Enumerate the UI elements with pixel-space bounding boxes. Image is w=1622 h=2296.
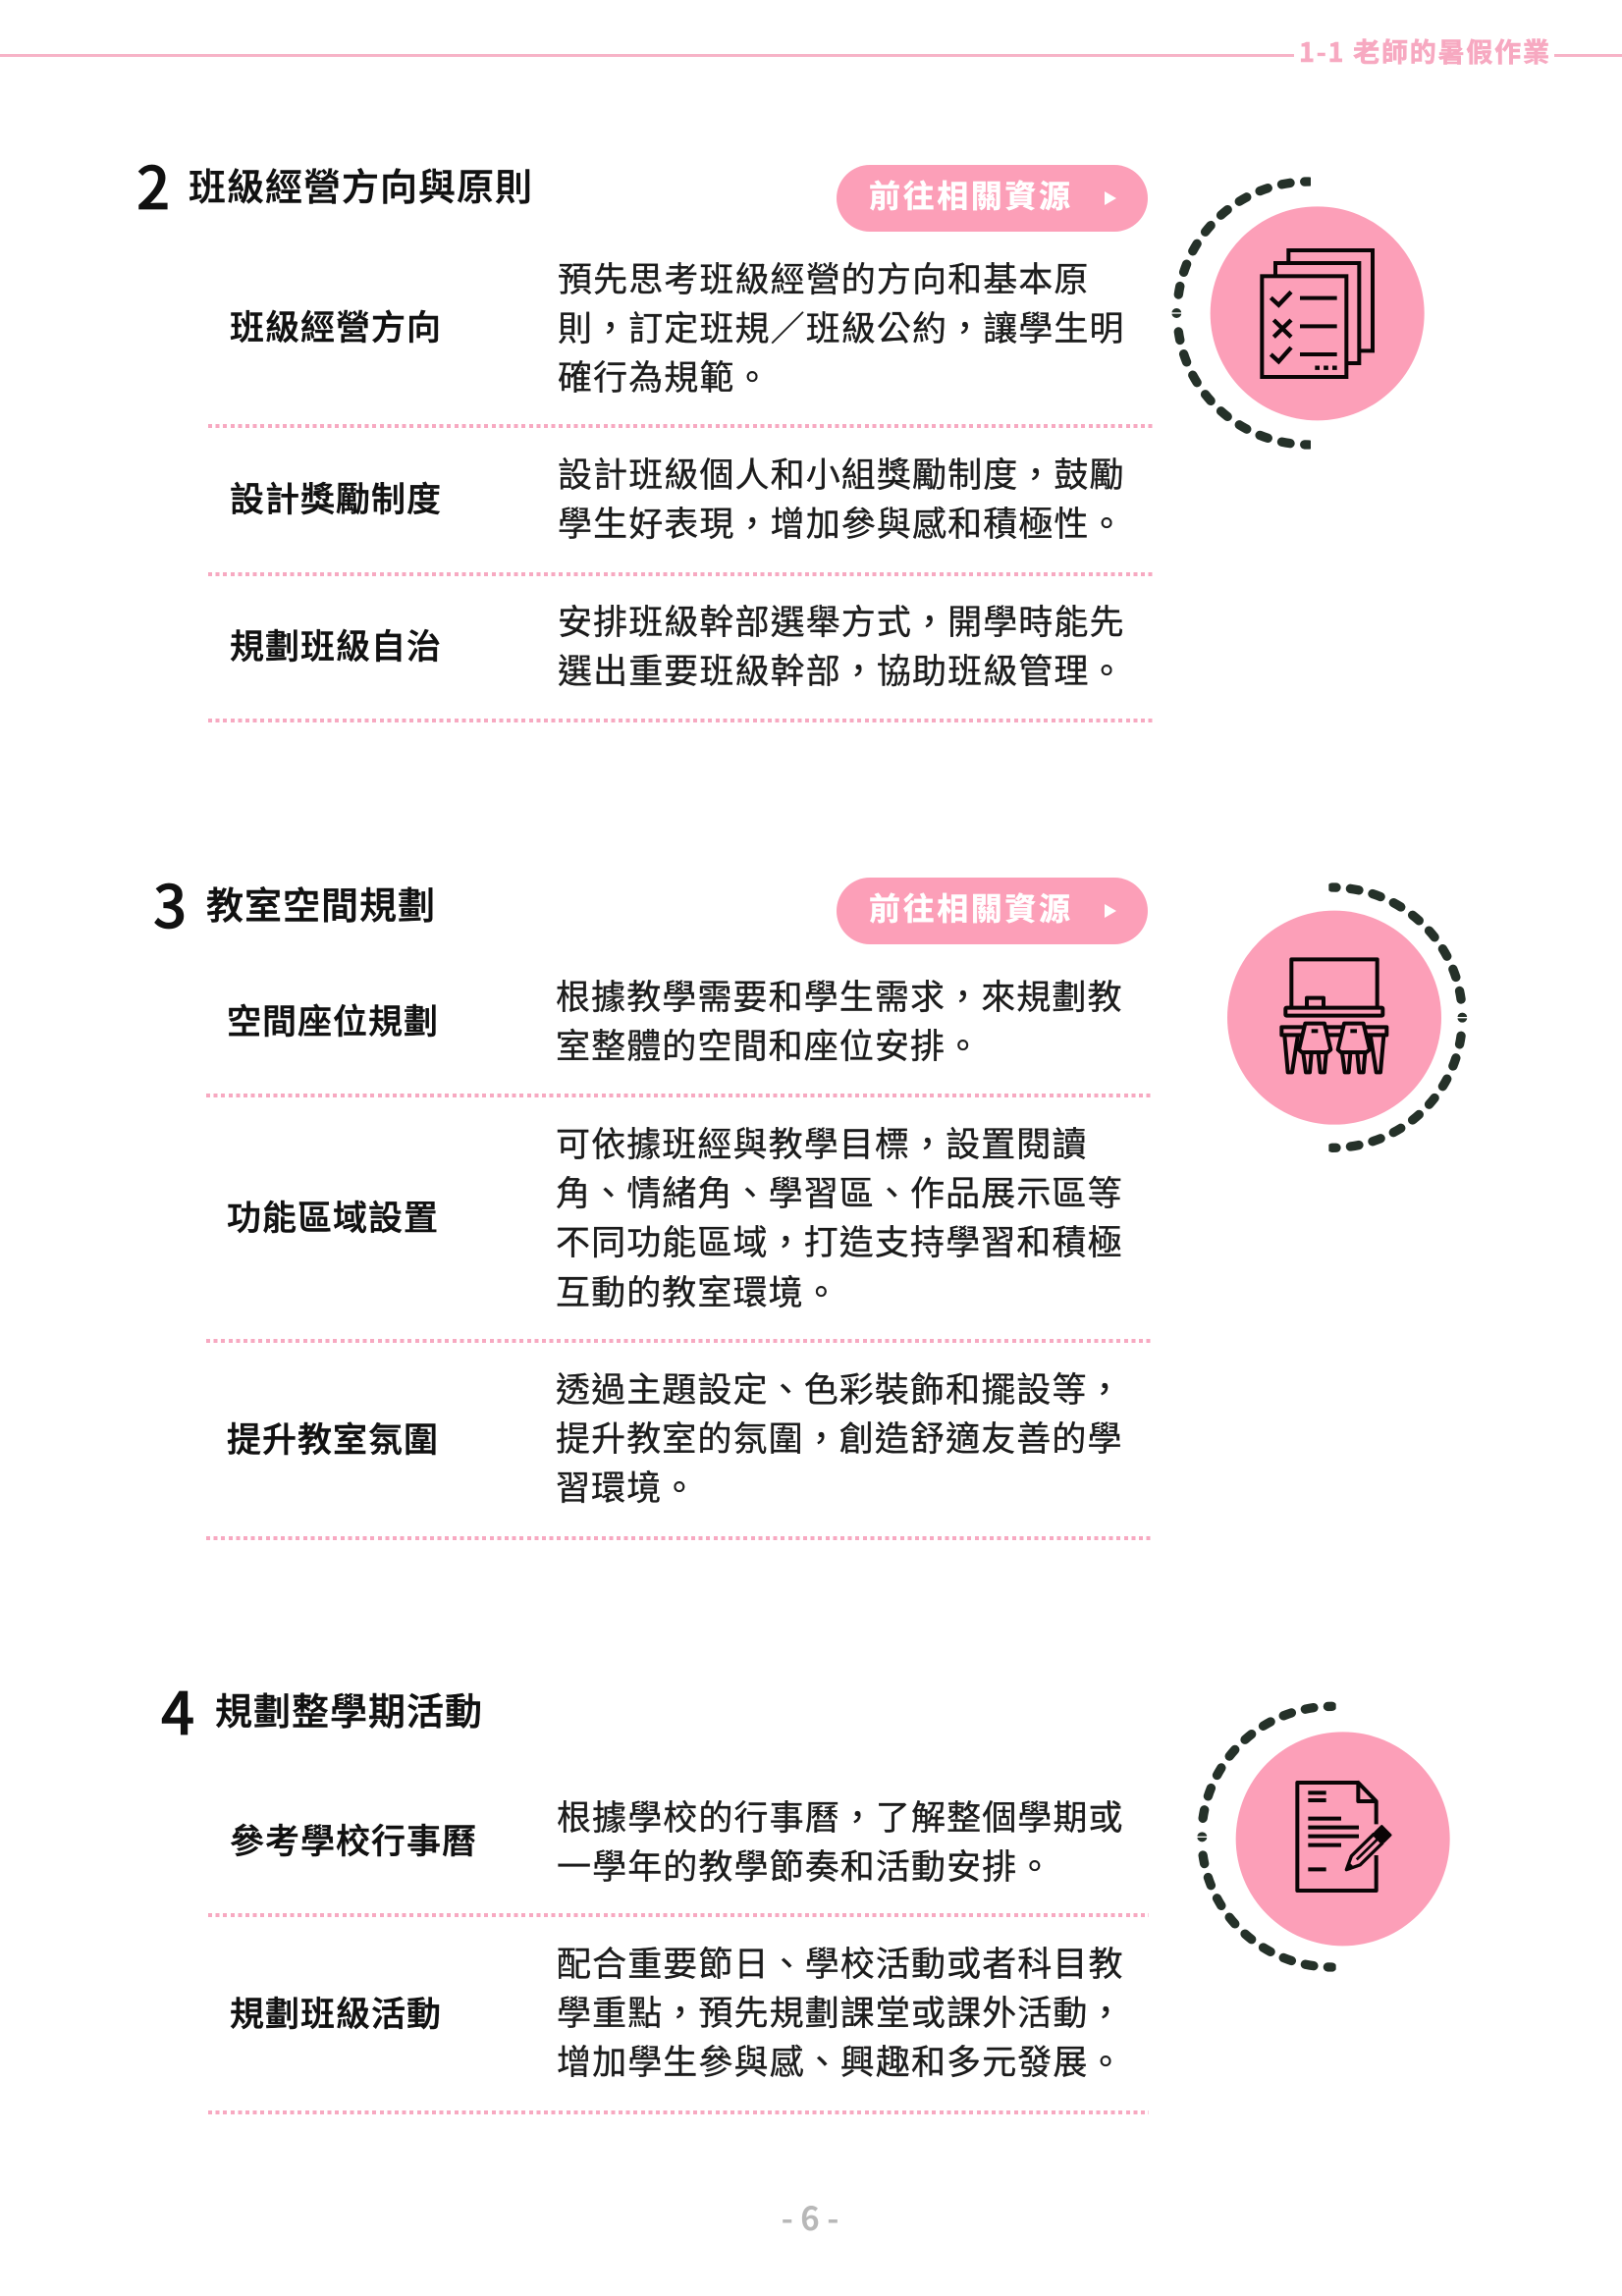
- section 2 row label: self governance: 規劃班級自治: [230, 618, 442, 669]
- section 3 row text: atmosphere: 習環境。: [556, 1461, 697, 1511]
- header rule left: [0, 54, 1294, 57]
- section 2 row text: reward system: 學生好表現，增加參與感和積極性。: [558, 497, 1125, 547]
- section 3 divider: [206, 1536, 1151, 1540]
- section 2 row text: self governance: [558, 595, 1125, 694]
- section 3 row text: seating: 室整體的空間和座位安排。: [556, 1019, 981, 1069]
- section 2 row text: class direction: 預先思考班級經營的方向和基本原: [558, 251, 1090, 302]
- header rule right: [1554, 54, 1622, 57]
- icon: classroom board and desks in pink circle with dashed arc: [1227, 882, 1467, 1152]
- section 2 heading: 班級經營方向與原則: [189, 157, 533, 211]
- section 3 row text: atmosphere: [556, 1362, 1123, 1511]
- section 3 row text: seating: 根據教學需要和學生需求，來規劃教: [556, 970, 1123, 1019]
- section 3 row label: seating: 空間座位規劃: [227, 993, 439, 1044]
- header running title: 1-1 老師的暑假作業: [1299, 31, 1551, 70]
- section 2 divider: [208, 719, 1153, 722]
- section 3 heading: 教室空間規劃: [206, 876, 436, 930]
- section 2 divider: [208, 424, 1153, 428]
- section 4 row text: school calendar: 一學年的教學節奏和活動安排。: [557, 1840, 1053, 1890]
- icon: checklist in pink circle with dashed arc: [1172, 177, 1425, 450]
- icon: document and pencil in pink circle with dashed arc: [1197, 1702, 1450, 1972]
- section 4 row text: class activities: 學重點，預先規劃課堂或課外活動，: [557, 1986, 1124, 2036]
- section 4 row text: school calendar: [557, 1790, 1124, 1890]
- section 2 divider: [208, 572, 1153, 576]
- section 3 row text: atmosphere: 透過主題設定、色彩裝飾和擺設等，: [556, 1362, 1123, 1412]
- section 4 row text: school calendar: 根據學校的行事曆，了解整個學期或: [557, 1790, 1124, 1840]
- section 4 row label: school calendar: 參考學校行事曆: [230, 1814, 477, 1863]
- section 4 divider: [208, 2110, 1149, 2114]
- section 3 row text: functional areas: 角、情緒角、學習區、作品展示區等: [556, 1166, 1123, 1216]
- section 4 heading: 規劃整學期活動: [215, 1682, 483, 1735]
- section 2 row text: class direction: 則，訂定班規／班級公約，讓學生明: [558, 301, 1125, 351]
- section 2 resource button: 前往相關資源: [869, 172, 1073, 217]
- section 3 resource button: 前往相關資源: [869, 884, 1073, 930]
- section 2 row text: class direction: 確行為規範。: [558, 350, 771, 400]
- section 2 row text: reward system: 設計班級個人和小組獎勵制度，鼓勵: [558, 448, 1125, 497]
- section 4 row text: class activities: 增加學生參與感、興趣和多元發展。: [557, 2035, 1124, 2085]
- section 2 row text: reward system: [558, 448, 1125, 547]
- section 2 row text: class direction: [558, 251, 1125, 400]
- section 4 row text: class activities: 配合重要節日、學校活動或者科目教: [557, 1936, 1124, 1987]
- section 4 row label: class activities: 規劃班級活動: [230, 1987, 442, 2036]
- section 3 row text: atmosphere: 提升教室的氛圍，創造舒適友善的學: [556, 1412, 1123, 1462]
- section 4 row text: class activities: [557, 1936, 1124, 2085]
- section 3 row label: atmosphere: 提升教室氛圍: [227, 1412, 439, 1463]
- section 3 row label: functional areas: 功能區域設置: [227, 1190, 439, 1241]
- section 3 divider: [206, 1339, 1151, 1343]
- section 3 number: 3: [153, 860, 187, 945]
- section 3 resource button: [837, 878, 1148, 944]
- section 4 number: 4: [161, 1667, 194, 1752]
- section 2 row text: self governance: 選出重要班級幹部，協助班級管理。: [558, 644, 1125, 694]
- section 3 divider: [206, 1094, 1151, 1097]
- section 2 number: 2: [136, 141, 170, 227]
- section 3 row text: functional areas: 互動的教室環境。: [556, 1265, 839, 1315]
- section 2 row text: self governance: 安排班級幹部選舉方式，開學時能先: [558, 595, 1125, 644]
- section 2 resource button: [837, 165, 1148, 232]
- section 3 row text: functional areas: 不同功能區域，打造支持學習和積極: [556, 1215, 1123, 1265]
- section 3 row text: seating: [556, 970, 1123, 1069]
- section 3 row text: functional areas: 可依據班經與教學目標，設置閱讀: [556, 1117, 1088, 1166]
- section 2 row label: reward system: 設計獎勵制度: [230, 471, 442, 522]
- section 3 row text: functional areas: [556, 1117, 1123, 1315]
- page number: - 6 -: [782, 2193, 838, 2240]
- section 4 divider: [208, 1913, 1149, 1917]
- section 2 row label: class direction: 班級經營方向: [230, 300, 442, 349]
